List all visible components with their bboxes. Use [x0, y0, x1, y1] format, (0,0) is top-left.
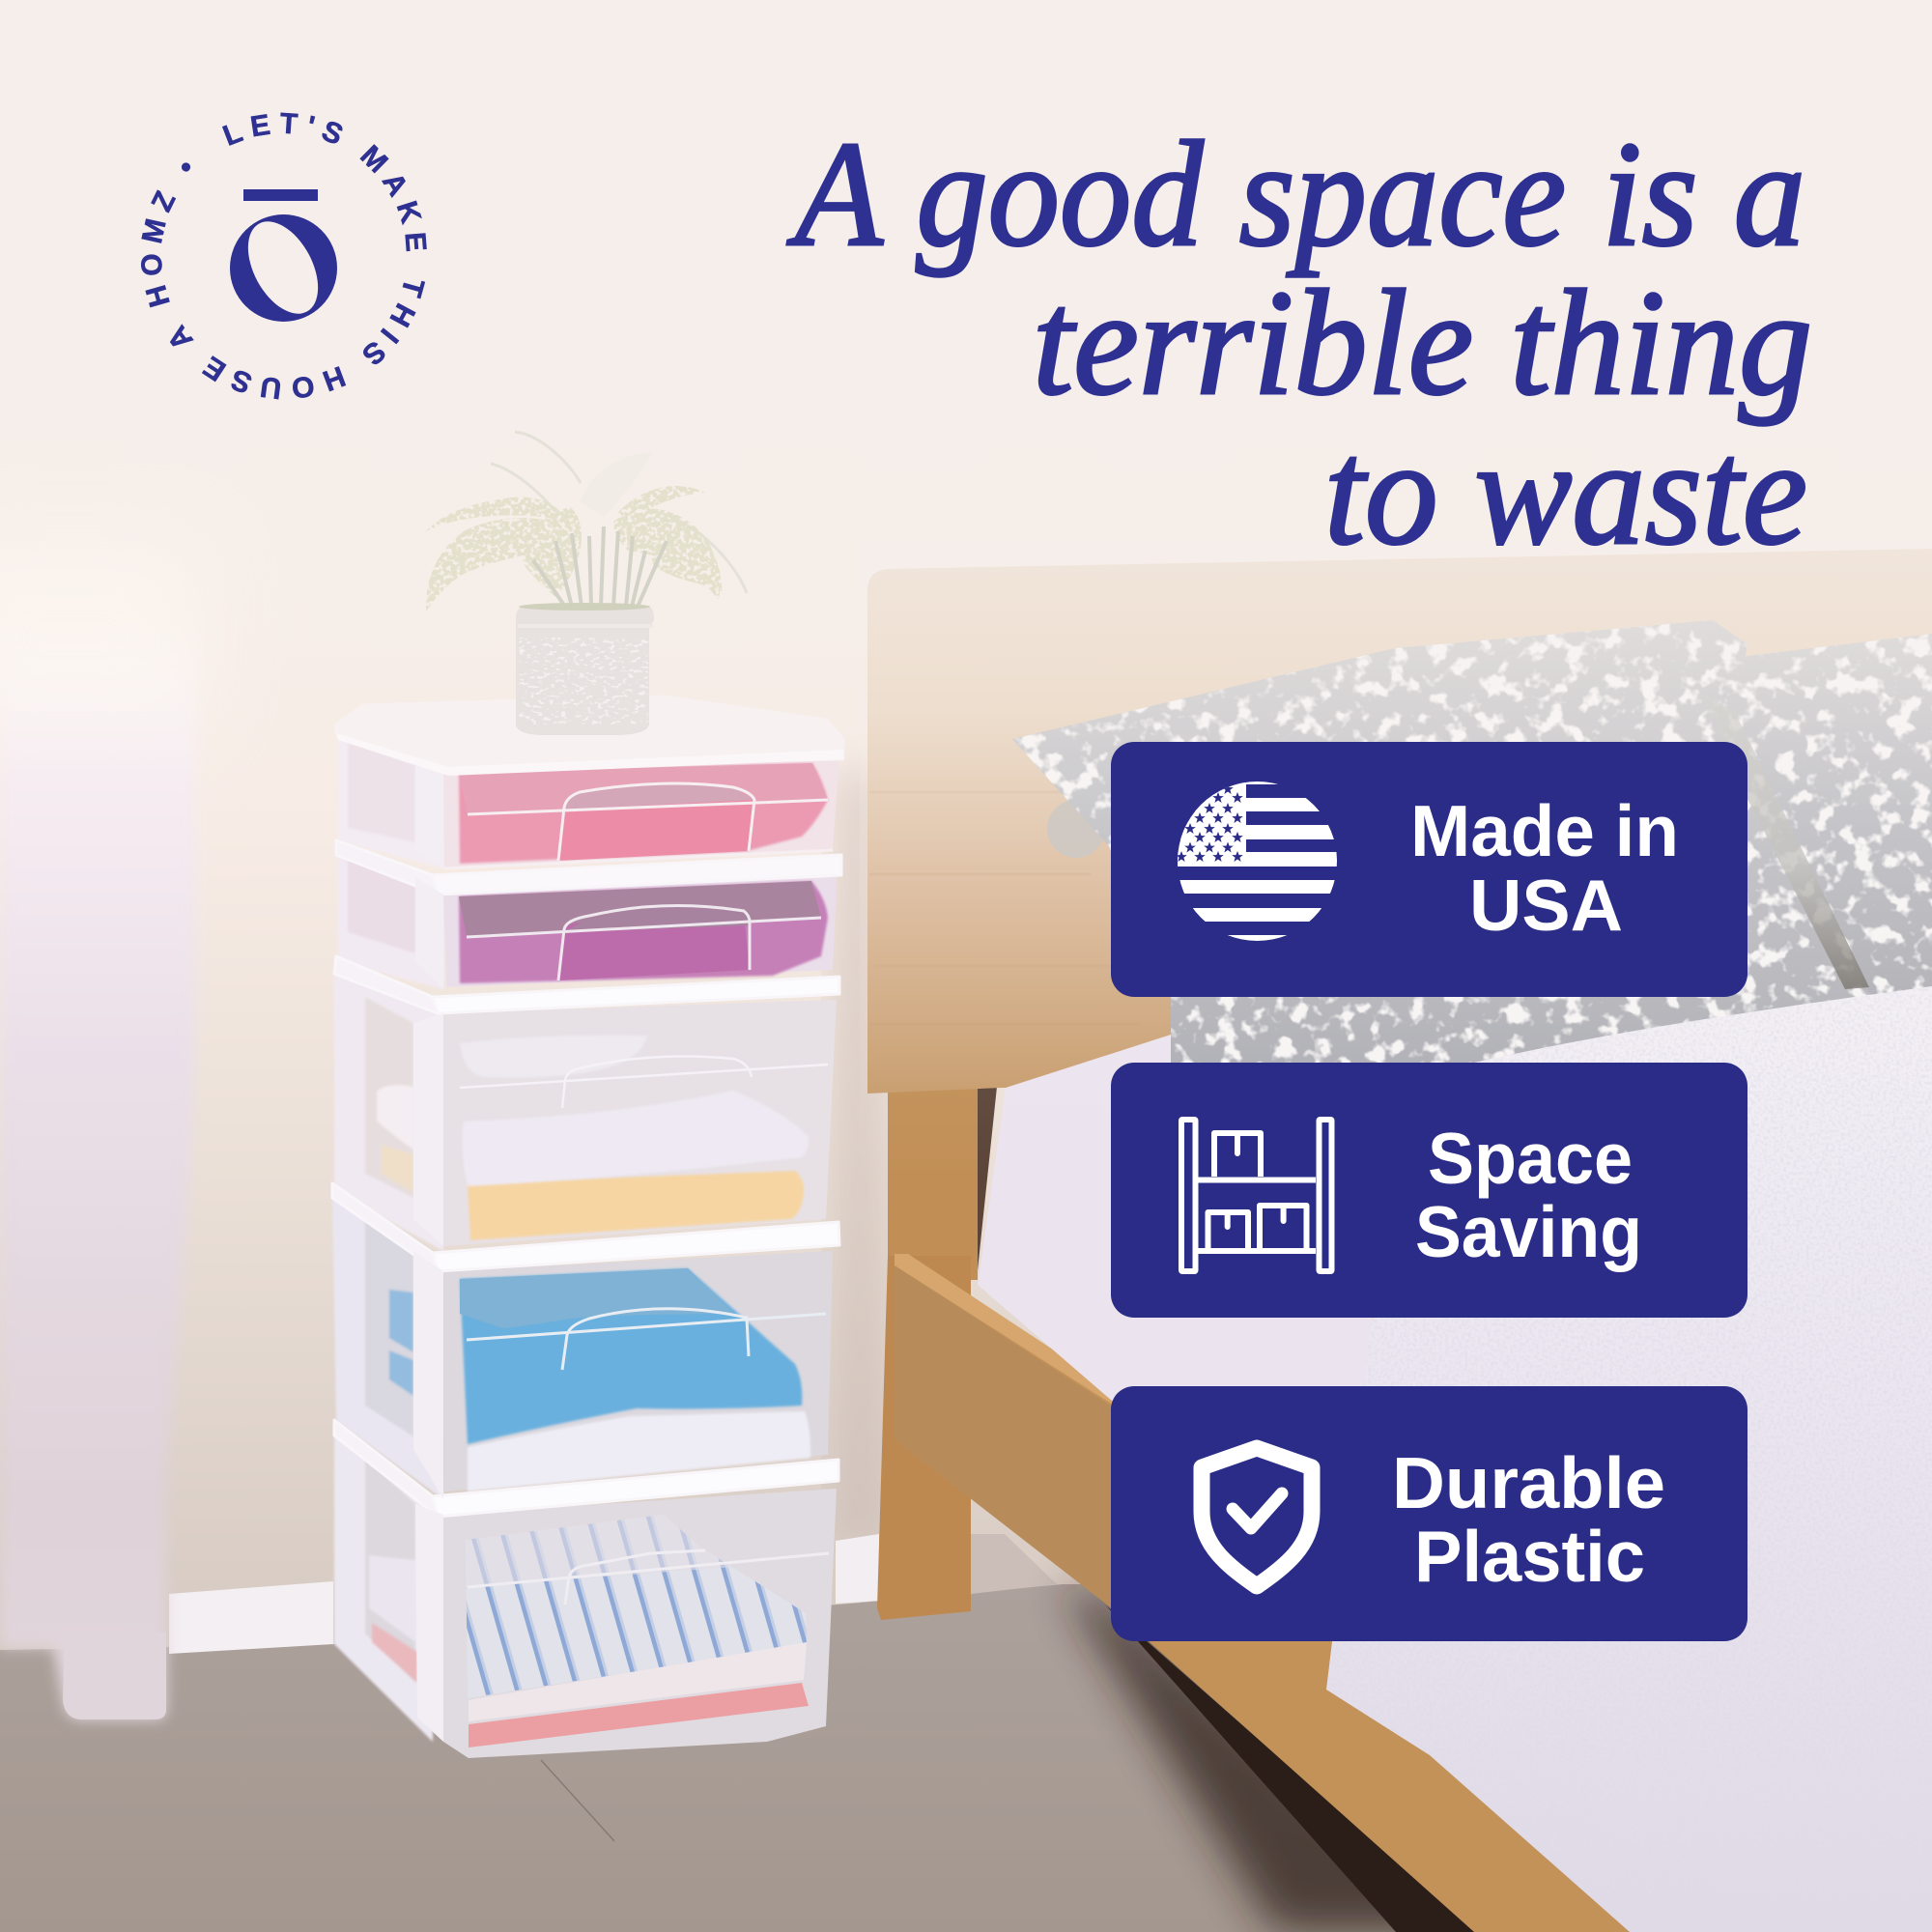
drawer 3: white and yellow clothes	[441, 1000, 837, 1246]
top lid	[335, 696, 843, 767]
pot rim	[518, 624, 653, 628]
headboard wood grain	[869, 792, 1159, 1024]
logo letter o	[230, 210, 337, 326]
drawer side panels	[332, 737, 443, 1742]
mattress sheet	[978, 1035, 1372, 1401]
floor	[0, 1584, 1932, 1932]
label	[1415, 1118, 1642, 1272]
storage drawer tower	[332, 696, 843, 1758]
baseboard left	[169, 1581, 333, 1654]
pale upper leaves	[580, 452, 653, 517]
headboard	[867, 549, 1932, 1094]
blanket	[1326, 986, 1932, 1932]
label	[1410, 790, 1679, 946]
icon: shield with check	[1202, 1448, 1312, 1586]
pot lace texture	[519, 638, 648, 724]
pillow shadow	[1047, 800, 1105, 858]
fern stems	[533, 526, 667, 607]
curtain	[0, 618, 198, 1719]
pot	[516, 606, 654, 735]
drawer 2: magenta clothes	[443, 877, 837, 987]
drawer 1: pink clothes	[443, 752, 839, 868]
drawer 4: blue and white clothes	[443, 1251, 833, 1492]
shadow under bed	[1063, 1584, 1488, 1932]
headline: A good space is a	[786, 110, 1805, 277]
feature card: Durable Plastic	[1111, 1386, 1747, 1641]
feature card: Made in USA	[1111, 742, 1747, 997]
headline: to waste	[1324, 409, 1807, 576]
feature card: Space Saving	[1111, 1063, 1747, 1318]
left pillow	[1005, 618, 1884, 1077]
fern fronds	[426, 486, 723, 611]
floor seam	[541, 1760, 614, 1841]
background: bedroom scene	[0, 549, 1932, 1932]
logo badge	[141, 112, 427, 400]
pillow fold shadow	[1708, 697, 1869, 989]
label	[1392, 1442, 1665, 1597]
label: USA	[1469, 865, 1623, 946]
label: Space	[1428, 1118, 1633, 1199]
label: Saving	[1415, 1191, 1642, 1272]
bed frame: side rail	[895, 1254, 1642, 1932]
label: Plastic	[1414, 1516, 1645, 1597]
circular slogan: LET'S MAKE THIS HOUSE A HOMZ •	[141, 112, 427, 400]
front pillars	[413, 765, 443, 1742]
baseboard right	[836, 1534, 879, 1604]
wispy stalks	[491, 432, 747, 593]
drawer rims and lips	[332, 840, 841, 1517]
icon: US flag circle	[1176, 781, 1338, 942]
window glow on left wall	[0, 541, 203, 734]
wall shade behind tower	[836, 773, 884, 1546]
label: Durable	[1392, 1442, 1665, 1523]
bed frame: leg	[877, 1256, 971, 1620]
pot soil	[519, 603, 650, 611]
icon: shelving with boxes	[1181, 1120, 1331, 1271]
plant in pot	[426, 432, 747, 735]
headline	[786, 110, 1812, 576]
headline: terrible thing	[1033, 259, 1812, 426]
soft fade over bed	[860, 541, 1932, 1179]
curtain hem	[63, 1633, 166, 1719]
bed frame: upper post	[888, 1087, 978, 1280]
drawer 5: striped and coral clothes	[441, 1489, 837, 1758]
logo macron	[243, 189, 318, 201]
label: Made in	[1410, 790, 1679, 871]
right pillow	[1739, 634, 1932, 995]
